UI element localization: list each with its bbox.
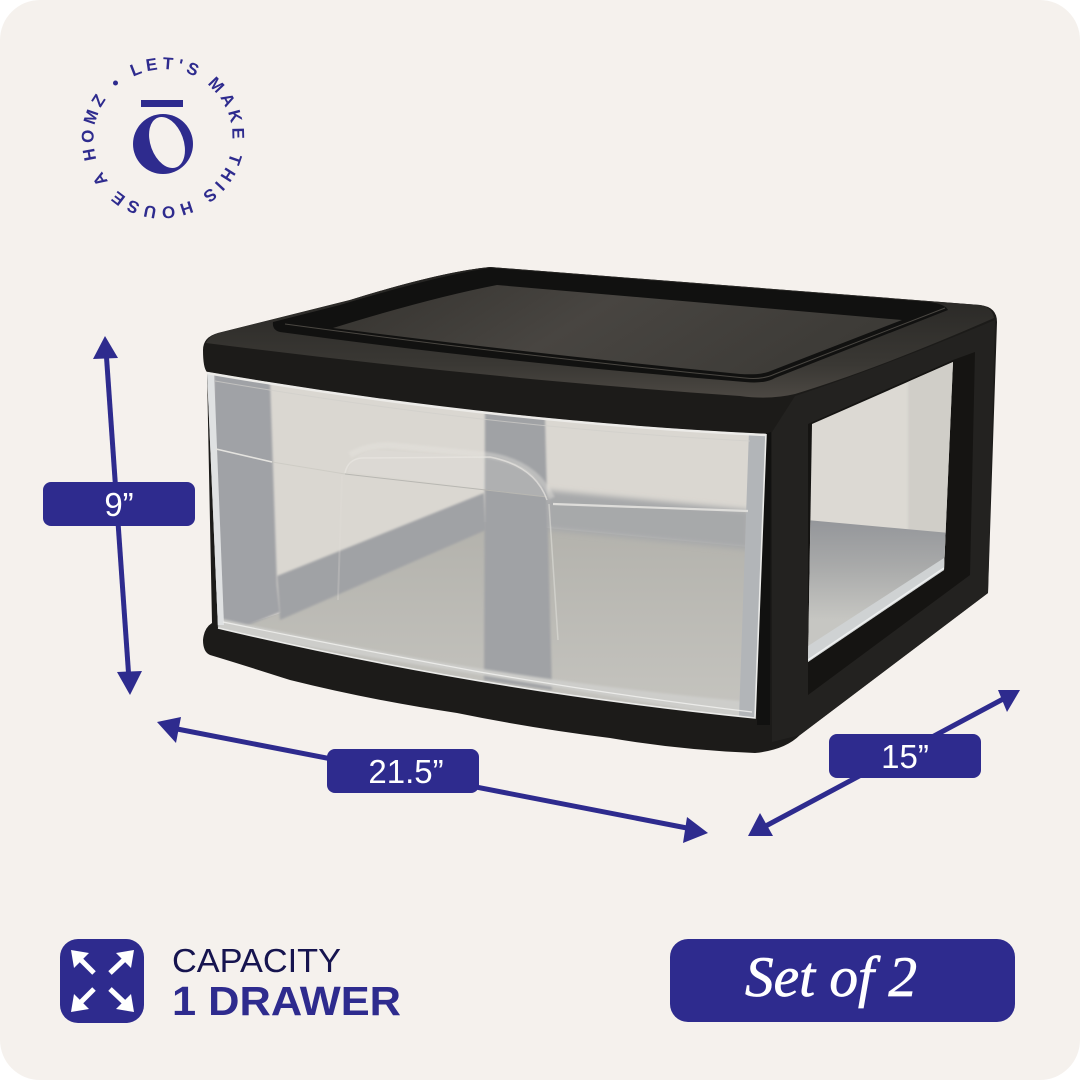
dimension: depth 15 in (748, 690, 1020, 836)
bottom lip (218, 618, 755, 720)
height badge (43, 482, 195, 526)
handle recess tint (484, 458, 546, 496)
right shadow band (545, 490, 750, 550)
capacity label: CAPACITY (172, 942, 341, 979)
depth badge: 15” (881, 738, 929, 775)
width arrow (157, 717, 708, 843)
rear left post (214, 370, 280, 632)
height arrow (93, 336, 142, 695)
drawer top edge highlight (207, 373, 766, 435)
lid rim (273, 268, 948, 382)
dimension: height 9 in (43, 336, 195, 695)
side window (808, 362, 953, 662)
logo dot (113, 80, 118, 86)
central post (484, 408, 552, 690)
drawer frame silhouette (203, 267, 997, 753)
drawer front edge (218, 434, 766, 718)
height badge: 9” (104, 486, 134, 523)
depth arrow (748, 690, 1020, 836)
icon: expand arrows (60, 939, 144, 1023)
capacity value: 1 DRAWER (172, 978, 401, 1024)
logo bar (141, 100, 183, 107)
set of 2 badge (670, 939, 1015, 1022)
left lip (207, 372, 224, 625)
logo badge (82, 57, 244, 218)
logo circular text: LET'S MAKE THIS HOUSE A HOMZ (82, 57, 244, 218)
capacity group (60, 939, 401, 1024)
right gutter (739, 436, 765, 717)
right post edge (757, 432, 771, 725)
lid panel (333, 285, 902, 374)
dimension: width 21.5 in (157, 717, 708, 843)
frame side face (772, 320, 995, 742)
drawer handle (216, 445, 748, 640)
lid lip highlight (285, 308, 945, 378)
width badge (327, 749, 479, 793)
drawer front (200, 365, 775, 725)
frame top surface (206, 267, 994, 398)
set of 2 badge: Set of 2 (745, 946, 917, 1009)
depth badge (829, 734, 981, 778)
product: storage drawer (200, 267, 997, 753)
logo letter o (133, 112, 193, 174)
drawer second top line (215, 381, 750, 441)
side window recess (808, 352, 975, 695)
diagonal shadow band (277, 493, 486, 620)
drawer bottom edge highlight (223, 622, 752, 712)
drawer floor (249, 528, 745, 712)
width badge: 21.5” (368, 753, 444, 790)
